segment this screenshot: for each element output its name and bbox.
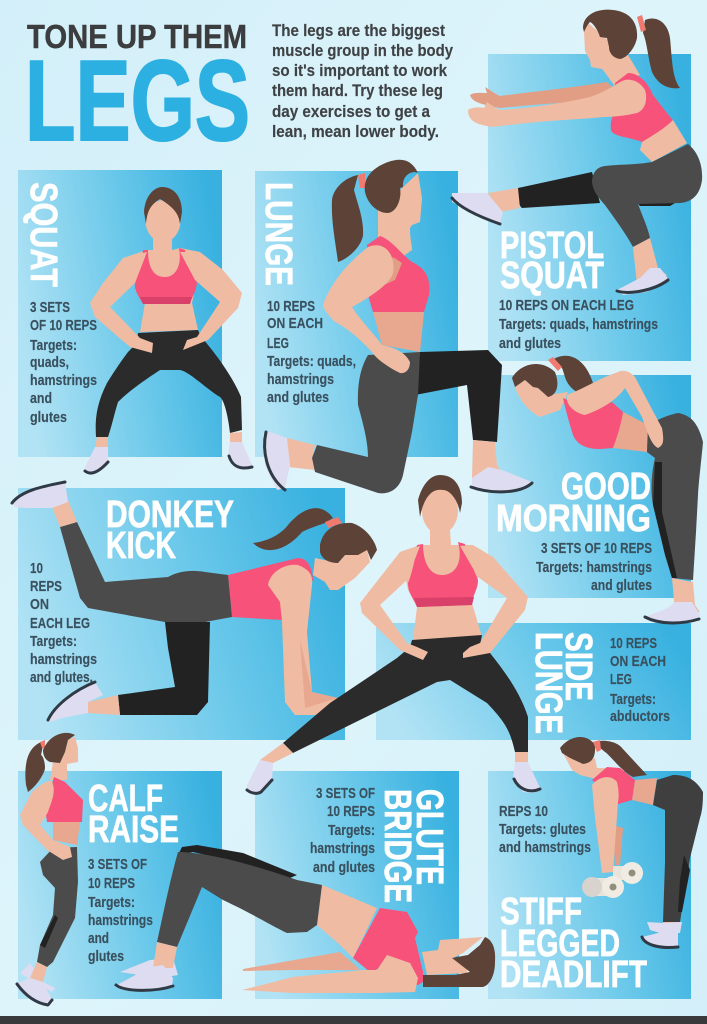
panel: squat: hamstrings — [30, 372, 97, 389]
panel: calf raise: 10 REPS — [88, 875, 135, 892]
panel: donkey kick: REPS — [30, 578, 62, 595]
panel: good morning: 3 SETS OF 10 REPS — [541, 540, 652, 557]
panel: side lunge: ON EACH — [610, 653, 666, 670]
panel: lunge — [255, 171, 458, 457]
panel: calf raise: glutes — [88, 948, 124, 965]
panel: lunge: hamstrings — [267, 371, 334, 388]
panel: squat — [18, 170, 222, 457]
intro text: lean, mean lower body. — [272, 123, 439, 141]
panel: stiff legged deadlift: and hamstrings — [499, 839, 591, 856]
panel: donkey kick: ON — [30, 596, 49, 613]
panel: glute bridge: 3 SETS OF — [316, 785, 375, 802]
panel: glute bridge: GLUTE — [408, 789, 450, 885]
figure: good morning woman — [512, 356, 703, 624]
title: LEGS — [25, 38, 250, 165]
figure: squat woman — [85, 187, 252, 473]
panel: calf raise: hamstrings — [88, 912, 153, 929]
panel: squat: and — [30, 390, 52, 407]
title: TONE UP THEM — [27, 18, 247, 55]
intro text: them hard. Try these leg — [272, 82, 443, 100]
panel: donkey kick: KICK — [106, 525, 176, 567]
figure: donkey kick woman — [12, 482, 377, 722]
panel: calf raise: CALF — [88, 778, 163, 820]
panel: side lunge: Targets: — [610, 691, 656, 708]
panel: stiff legged deadlift: REPS 10 — [499, 803, 548, 820]
panel: donkey kick: DONKEY — [106, 494, 234, 536]
intro text — [272, 22, 454, 141]
panel: squat: Targets: — [30, 337, 77, 354]
panel: calf raise: RAISE — [88, 809, 179, 851]
figure: calf raise woman — [17, 733, 83, 1005]
panel: donkey kick — [18, 488, 345, 740]
panel: stiff legged deadlift: STIFF — [500, 891, 582, 933]
panel: lunge: and glutes — [267, 389, 329, 406]
panel: side lunge — [376, 623, 691, 740]
panel: squat: quads, — [30, 354, 69, 371]
panel: calf raise: and — [88, 930, 109, 947]
intro text: The legs are the biggest — [272, 22, 445, 40]
panel: stiff legged deadlift: DEADLIFT — [500, 954, 647, 996]
panel: donkey kick: Targets: — [30, 633, 77, 650]
panel: donkey kick: hamstrings — [30, 651, 97, 668]
figure: glute bridge woman — [116, 845, 495, 993]
intro text: muscle group in the body — [272, 42, 454, 60]
title — [25, 18, 250, 165]
panel: side lunge: SIDE — [557, 632, 599, 701]
panel: lunge: 10 REPS — [267, 298, 315, 315]
panel: pistol squat — [488, 54, 691, 361]
panel: pistol squat: Targets: quads, hamstrings — [499, 316, 658, 333]
figure: pistol squat woman — [452, 10, 702, 295]
panel: side lunge: abductors — [610, 708, 670, 725]
panel: side lunge: LUNGE — [527, 632, 569, 734]
panel: pistol squat: PISTOL — [500, 225, 604, 267]
panel: donkey kick: 10 — [30, 560, 43, 577]
panel: calf raise: Targets: — [88, 894, 135, 911]
panel: pistol squat: 10 REPS ON EACH LEG — [499, 297, 634, 314]
panel: pistol squat: SQUAT — [500, 255, 604, 297]
panel: side lunge: LEG — [610, 671, 632, 688]
figure: stiff legged deadlift woman — [560, 737, 703, 948]
panel: stiff legged deadlift — [488, 771, 691, 999]
panel: lunge: Targets: quads, — [267, 353, 356, 370]
figure: side lunge woman — [247, 475, 540, 793]
panel: good morning: MORNING — [496, 498, 651, 540]
panel: glute bridge: BRIDGE — [376, 789, 418, 903]
intro text: day exercises to get a — [272, 103, 431, 121]
panel: squat: OF 10 REPS — [30, 317, 97, 334]
panel: glute bridge: 10 REPS — [327, 803, 375, 820]
panel: pistol squat: and glutes — [499, 335, 561, 352]
intro text: so it's important to work — [272, 62, 448, 80]
panel: squat: SQUAT — [22, 182, 64, 287]
panel: lunge: LUNGE — [257, 182, 299, 286]
footer bar — [0, 1016, 707, 1024]
panel: good morning — [488, 375, 691, 598]
panel: squat: 3 SETS — [30, 299, 70, 316]
panel: good morning: and glutes — [591, 577, 652, 594]
panel: lunge: ON EACH — [267, 315, 323, 332]
panel: glute bridge: hamstrings — [310, 840, 375, 857]
panel: squat: glutes — [30, 409, 67, 426]
panel: glute bridge: Targets: — [328, 822, 375, 839]
panel: stiff legged deadlift: Targets: glutes — [499, 821, 586, 838]
panel: calf raise — [18, 771, 222, 999]
panel: good morning: Targets: hamstrings — [536, 559, 652, 576]
panel: stiff legged deadlift: LEGGED — [500, 923, 620, 965]
figure: lunge woman — [263, 160, 532, 493]
panel: calf raise: 3 SETS OF — [88, 856, 147, 873]
panel: good morning: GOOD — [561, 466, 651, 508]
panel: side lunge: 10 REPS — [610, 635, 657, 652]
panel: donkey kick: EACH LEG — [30, 615, 90, 632]
panel: lunge: LEG — [267, 335, 289, 352]
panel: donkey kick: and glutes, — [30, 669, 93, 686]
panel: glute bridge: and glutes — [313, 859, 375, 876]
panel: glute bridge — [255, 771, 459, 999]
